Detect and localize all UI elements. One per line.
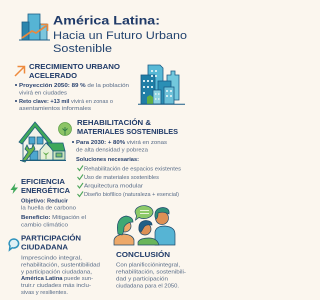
heading: rehabilitación: MATERIALES SOSTENIBLES [77, 127, 178, 136]
panel: eficiencia energética [10, 177, 86, 228]
heading: crecimiento urbano: CRECIMIENTO URBANO [29, 62, 120, 71]
bullet: para 2030: Para 2030: + 80% vivirá en zonas [76, 140, 167, 146]
text: participación body: sivas y resilientes. [21, 290, 68, 296]
text: participación body: y participación ciudadana, [21, 270, 92, 276]
heading: rehabilitación: REHABILITACIÓN & [77, 118, 152, 127]
text: conclusión body: rehabilitación, sostenibili- [116, 270, 186, 276]
icon: house with wrench [19, 122, 66, 162]
bullet: proyección [15, 83, 129, 96]
bullet: reto clave: asentamientos informales [19, 106, 91, 112]
bullet: reto clave [15, 99, 113, 112]
text: participación body: rehabilitación, sustentibilidad [21, 262, 100, 268]
heading: eficiencia: EFICIENCIA [21, 177, 66, 186]
heading: crecimiento urbano: ACELERADO [29, 71, 77, 80]
speech bubble [135, 206, 153, 220]
text: participación body [21, 256, 100, 296]
bullet: para 2030: de alta densidad y pobreza [76, 148, 149, 154]
icon: city skyline [138, 65, 185, 104]
icon: orange growth arrow [15, 66, 24, 76]
text: beneficio: Beneficio: Mitigación el [21, 215, 86, 221]
text: conclusión body: Con planificciónintegral, [116, 262, 180, 268]
panel: crecimiento urbano acelerado [15, 62, 129, 112]
text: participación body: truir.r ciudades más inclu- [21, 283, 91, 289]
bullet: para 2030 [72, 140, 167, 154]
checklist [78, 166, 181, 198]
title: Hacia un Futuro Urbano [53, 30, 187, 42]
panel: participación ciudadana [9, 234, 100, 296]
title [53, 14, 187, 55]
heading: rehabilitación [77, 118, 178, 136]
heading: participación: CIUDADANA [21, 242, 69, 252]
text: participación body: América Latina puede sun- [21, 276, 93, 282]
text: conclusión body [116, 262, 186, 290]
checklist: Arquitectura modular [84, 184, 143, 190]
heading: conclusión: CONCLUSIÓN [116, 250, 170, 259]
bullet: reto clave: Reto clave: +13 mil vivirá en zonas o [19, 99, 113, 105]
title: Sostenible [53, 43, 112, 55]
heading: crecimiento urbano [29, 62, 120, 80]
text: objetivo: la huella de carbono [21, 206, 76, 212]
checklist: Rehabilitación de espacios existentes [84, 166, 181, 172]
title: América Latina: [53, 14, 160, 28]
text: beneficio: cambio climático [21, 222, 68, 228]
text: participación body: Imprescindo integral, [21, 256, 83, 262]
heading: eficiencia [21, 177, 71, 195]
text: objetivo [21, 198, 76, 212]
checklist: Diseño biofílico (naturaleza + esencial) [84, 192, 179, 198]
icon: three people talking [114, 206, 175, 245]
text: conclusión body: ciudadana para el 2050. [116, 284, 179, 290]
panel: rehabilitación y materiales [72, 118, 181, 198]
heading: participación: PARTICIPACIÓN [21, 234, 81, 242]
subheading: soluciones necesarias: Soluciones necesarias: [76, 157, 139, 163]
text: conclusión body: dad y participación [116, 276, 168, 282]
text: beneficio [21, 215, 86, 228]
bullet: proyección: vivirá en ciudades [19, 90, 67, 96]
checklist: Uso de materiales sostenibles [84, 175, 159, 181]
icon: leaf tree circle [58, 122, 72, 136]
icon: chat bubble [9, 239, 19, 250]
panel: conclusión [116, 250, 186, 290]
bullet: proyección: Proyección 2050: 89 % de la población [19, 83, 129, 89]
text: objetivo: Objetivo: Reducir [21, 198, 69, 204]
heading: participación [21, 234, 81, 252]
heading: eficiencia: ENERGÉTICA [21, 186, 71, 195]
icon: city with growth arrow [19, 14, 50, 40]
icon: lightning bolt [10, 183, 18, 194]
